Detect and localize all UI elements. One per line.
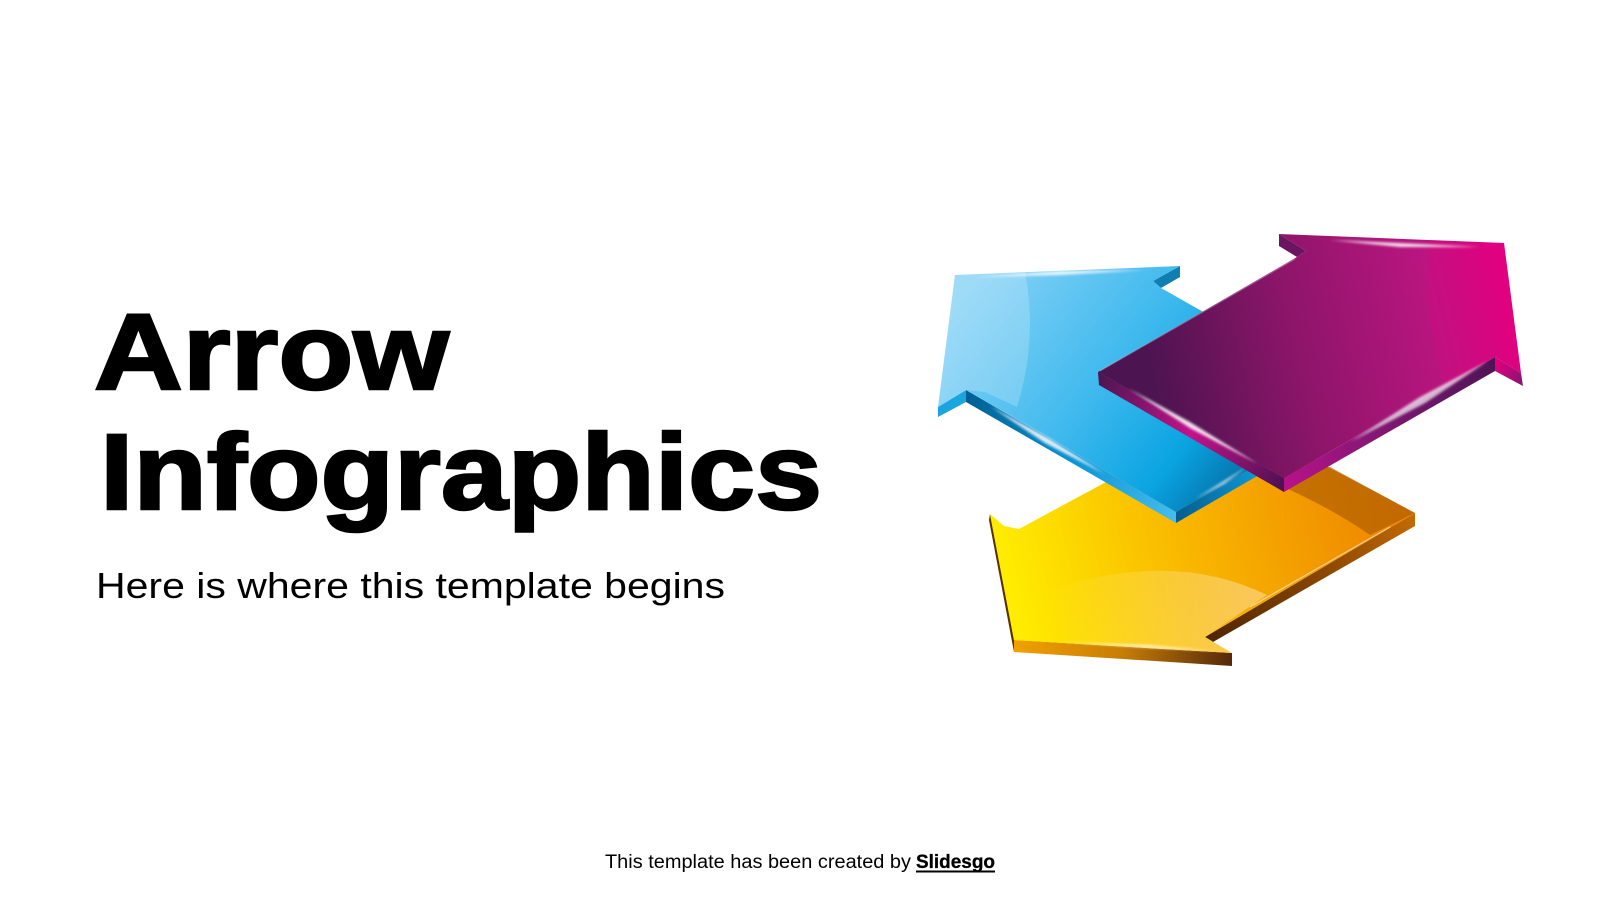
title: Arrow: [94, 291, 450, 412]
footer credit: Slidesgo: [916, 852, 995, 873]
title: [94, 291, 822, 532]
title: Infographics: [100, 411, 822, 532]
icon: blue arrow pointing upper left: [938, 266, 1290, 523]
icon: yellow arrow pointing lower left: [989, 415, 1415, 666]
icon: magenta arrow pointing upper right: [1098, 234, 1523, 492]
footer credit: This template has been created by: [605, 852, 912, 873]
subtitle: Here is where this template begins: [96, 565, 725, 606]
illustration: three 3D arrows: [938, 234, 1523, 666]
